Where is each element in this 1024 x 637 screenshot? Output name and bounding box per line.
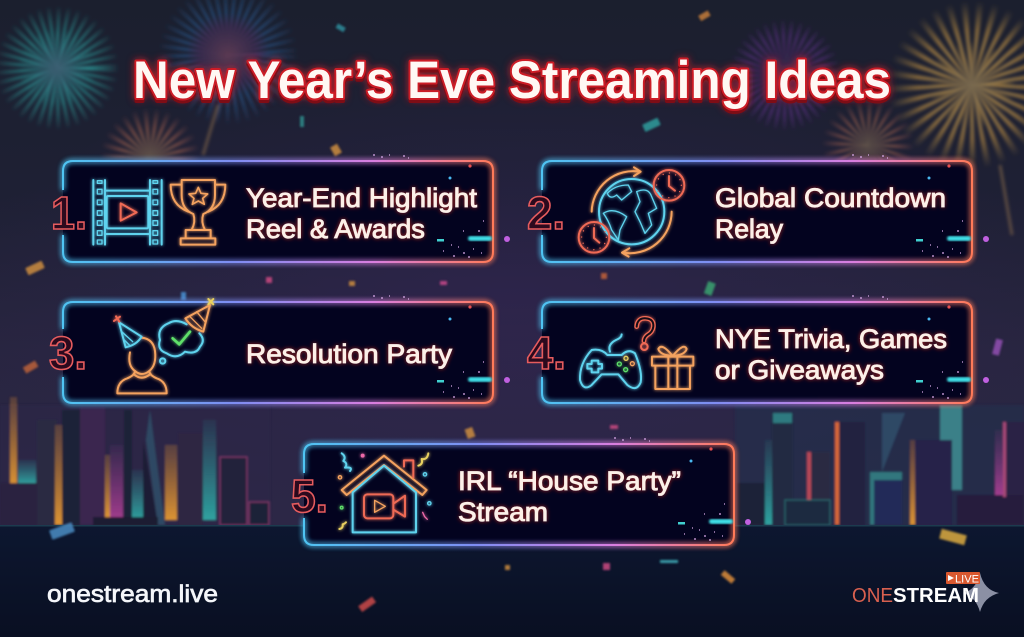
text: resolution party: Resolution Party — [246, 339, 453, 369]
dark ground band — [0, 525, 1024, 637]
fireworks — [26, 20, 1014, 235]
icon: house with video camera — [338, 453, 431, 532]
icon: question mark — [637, 318, 653, 350]
text: year-end highlight reel and awards: Year-End Highlight — [246, 183, 478, 213]
panel 2: global countdown relay — [527, 155, 989, 262]
panel 5 frame — [304, 444, 734, 545]
website url: onestream.live — [47, 581, 218, 608]
panel 4 frame — [542, 302, 972, 403]
text: year-end highlight reel and awards: Reel & Awards — [246, 214, 425, 244]
panel 1 frame — [63, 161, 493, 262]
icon: trophy — [171, 180, 225, 245]
text: trivia, games or giveaways: NYE Trivia, Games — [715, 324, 947, 354]
icon: film strip — [93, 180, 162, 245]
panel 1: highlight reel and awards — [51, 155, 510, 262]
icon: person with party hats and thought bubble — [114, 299, 213, 393]
panel 5: IRL house party stream — [291, 438, 751, 545]
panel 3 sparkles — [373, 296, 510, 398]
number 1: 1. — [51, 187, 87, 239]
panel 5 sparkles — [614, 438, 751, 540]
panel 1 sparkles — [373, 155, 510, 257]
text: IRL house party stream — [458, 466, 681, 527]
logo wordmark: ONE — [852, 585, 893, 607]
text: trivia, games or giveaways — [715, 324, 947, 385]
number 5: 5. — [291, 470, 328, 522]
icon: globe with clocks — [579, 167, 684, 257]
number 4: 4. — [527, 327, 566, 379]
panel 4 sparkles — [852, 296, 989, 398]
panel 4: trivia, games, giveaways — [527, 296, 989, 403]
number 3: 3. — [49, 327, 87, 379]
icon: game controller — [580, 334, 641, 388]
title: New Year’s Eve Streaming Ideas — [133, 51, 891, 110]
logo: OneStream Live — [852, 572, 999, 612]
text: global countdown relay: Relay — [715, 214, 783, 244]
icon: gift box — [652, 347, 693, 389]
logo star — [963, 573, 999, 612]
text: global countdown relay: Global Countdown — [715, 183, 946, 213]
text: global countdown relay — [715, 183, 946, 244]
city skyline — [0, 397, 1024, 526]
number 2: 2. — [527, 187, 565, 239]
text: IRL house party stream: Stream — [458, 497, 548, 527]
text: IRL house party stream: IRL “House Party” — [458, 466, 681, 496]
logo live badge — [946, 572, 980, 584]
panel 2 sparkles — [852, 155, 989, 257]
text: year-end highlight reel and awards — [246, 183, 478, 244]
logo: OneStream Live: STREAM — [893, 585, 979, 607]
text: trivia, games or giveaways: or Giveaways — [715, 355, 884, 385]
panel 2 frame — [542, 161, 972, 262]
logo: OneStream Live: LIVE — [955, 574, 979, 586]
panel 3: resolution party — [49, 296, 510, 403]
panel 3 frame — [63, 302, 493, 403]
